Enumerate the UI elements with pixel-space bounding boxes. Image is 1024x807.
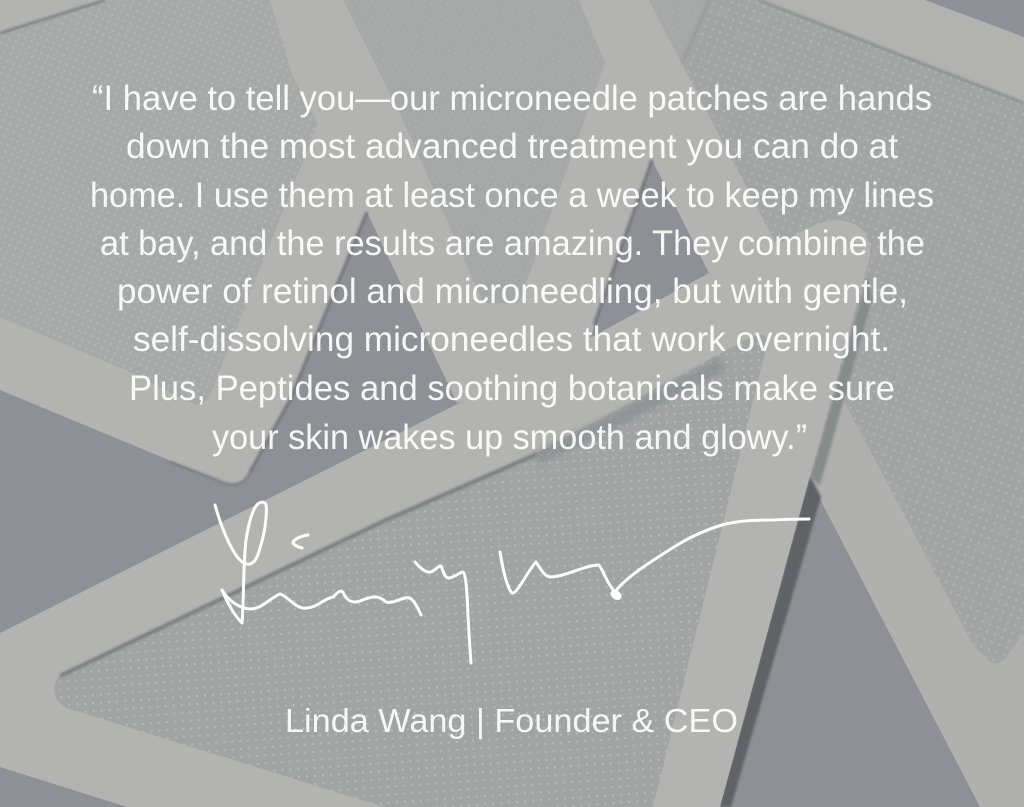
quote text: your skin wakes up smooth and glowy.” — [212, 418, 807, 457]
quote text: Plus, Peptides and soothing botanicals make sure — [129, 369, 895, 408]
quote text: home. I use them at least once a week to keep my lines — [90, 176, 934, 215]
lower right frame band — [700, 130, 1024, 807]
signature — [215, 502, 809, 663]
quote text — [90, 79, 934, 457]
upper middle dotted sliver — [649, 0, 709, 63]
upper left and crossing frame bands — [0, 0, 800, 484]
big triangle frame — [0, 220, 870, 807]
top right frame band — [759, 0, 1024, 103]
attribution: Linda Wang | Founder & CEO — [285, 702, 738, 739]
frame edge shadows — [0, 0, 1024, 484]
upper centre dotted patch — [343, 0, 453, 120]
quote text: at bay, and the results are amazing. They combine the — [100, 224, 925, 263]
right dotted patch — [682, 0, 1024, 663]
big triangle dotted patch — [54, 335, 767, 807]
centre dotted patch — [403, 0, 605, 303]
right gray triangle opening — [590, 160, 709, 338]
big triangle cast shadow — [719, 475, 821, 807]
quote text: “I have to tell you—our microneedle patches are hands — [92, 79, 932, 118]
quote text: power of retinol and microneedling, but with gentle, — [117, 272, 908, 311]
shaded dark area at inner patch top — [537, 364, 722, 458]
big triangle inner shadow — [60, 454, 537, 676]
quote text: down the most advanced treatment you can do at — [126, 127, 898, 166]
quote text: self-dissolving microneedles that work overnight. — [133, 320, 890, 359]
left dotted patch — [0, 0, 318, 405]
